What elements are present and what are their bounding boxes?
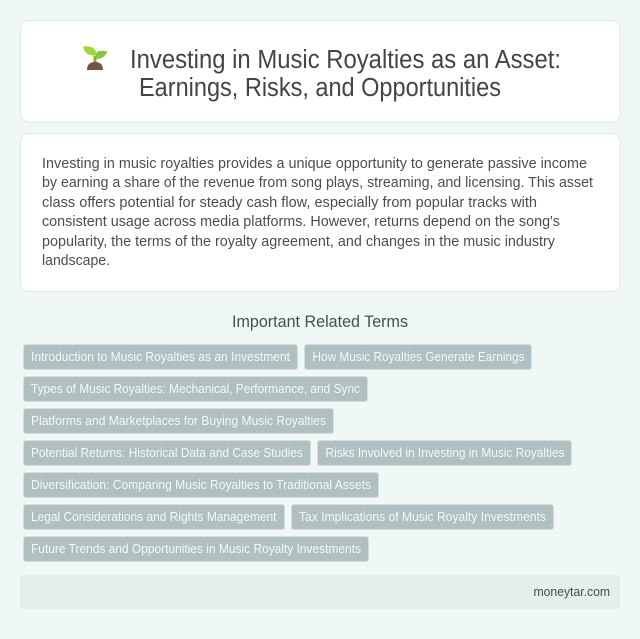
- footer: [20, 575, 620, 609]
- tag 4: Platforms and Marketplaces for Buying Music Royalties: [31, 413, 326, 428]
- tag 8: Legal Considerations and Rights Management: [31, 509, 277, 524]
- text block: description: Investing in music royalties provides a unique opportunity to generate passive income: [42, 155, 587, 172]
- tag 7: Diversification: Comparing Music Royalties to Traditional Assets: [31, 477, 371, 492]
- tag 5: Potential Returns: Historical Data and Case Studies: [31, 445, 303, 460]
- text block: description: landscape.: [42, 252, 110, 269]
- tag 10: Future Trends and Opportunities in Music Royalty Investments: [31, 541, 361, 556]
- tag 6: [318, 440, 572, 466]
- text block: description: class offers potential for steady cash flow, especially from popular tracks with: [42, 194, 537, 211]
- tag 5: [24, 440, 310, 466]
- tag 3: Types of Music Royalties: Mechanical, Performance, and Sync: [31, 381, 360, 396]
- footer: site name: moneytar.com: [534, 584, 610, 599]
- heading: related terms: Important Related Terms: [232, 313, 408, 331]
- tag 9: Tax Implications of Music Royalty Investments: [299, 509, 546, 524]
- text block: description: popularity, the terms of the royalty agreement, and changes in the music industry: [42, 233, 555, 250]
- text block: description: by earning a share of the revenue from song plays, streaming, and licensing. This asset: [42, 174, 594, 191]
- title: [130, 46, 561, 102]
- tag 9: [292, 504, 554, 530]
- tag 2: How Music Royalties Generate Earnings: [312, 349, 525, 364]
- text block: description: [42, 155, 594, 269]
- tag 10: [24, 536, 368, 562]
- title: Earnings, Risks, and Opportunities: [139, 74, 501, 102]
- text block: description: consistent usage across media platforms. However, returns depend on the song's: [42, 213, 560, 230]
- tag 4: [24, 408, 334, 434]
- title: Investing in Music Royalties as an Asset:: [130, 46, 561, 74]
- panel: header: [20, 20, 620, 122]
- tag 2: [304, 344, 532, 370]
- tag 1: Introduction to Music Royalties as an Investment: [31, 349, 290, 364]
- tag 8: [24, 504, 284, 530]
- tag 7: [24, 472, 378, 498]
- tag 6: Risks Involved in Investing in Music Royalties: [326, 445, 565, 460]
- panel: description: [20, 134, 620, 292]
- tag 3: [24, 376, 368, 402]
- tag list: [24, 344, 572, 562]
- icon: seedling: [83, 46, 107, 70]
- tag 1: [24, 344, 298, 370]
